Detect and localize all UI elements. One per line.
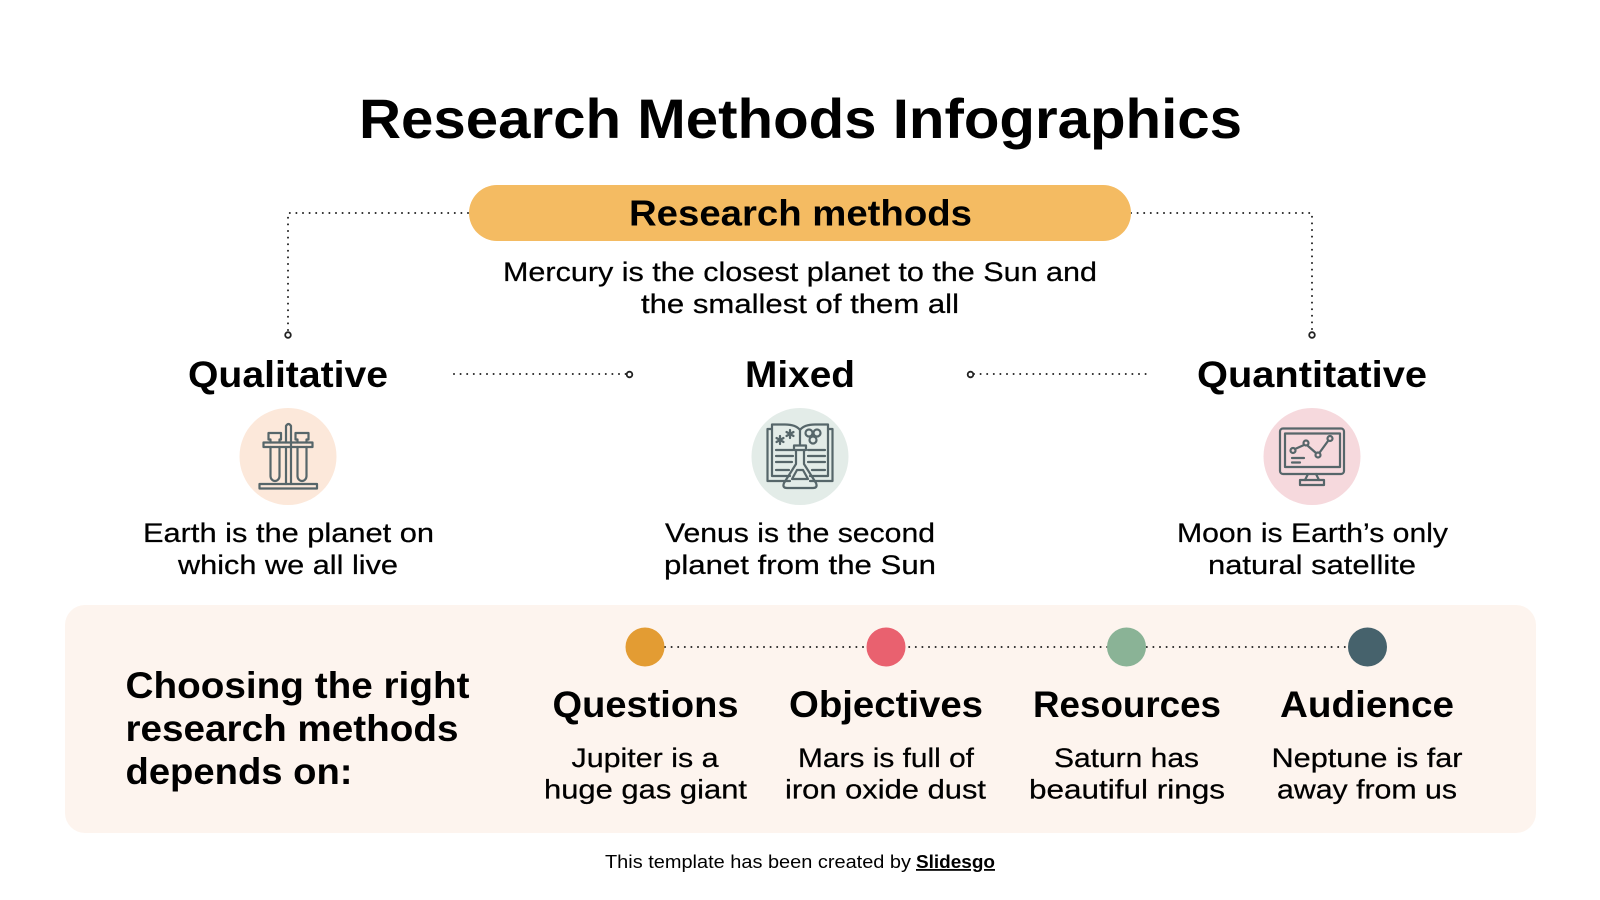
column: questions: Questions — [552, 684, 738, 725]
connector: qualitative to mixed — [454, 372, 632, 377]
column: audience: Neptune is far — [1272, 743, 1463, 773]
description: qualitative: which we all live — [177, 550, 398, 580]
panel: choosing the right research methods — [65, 605, 1536, 833]
connector: methods pill to quantitative — [1131, 213, 1315, 338]
column: objectives: Mars is full of — [798, 743, 975, 773]
column: questions — [544, 684, 748, 804]
column: audience — [1272, 684, 1463, 804]
description: qualitative — [143, 518, 434, 580]
description: mixed: Venus is the second — [665, 518, 935, 548]
footer credit: Slidesgo — [916, 852, 995, 872]
heading: choosing the right research methods — [126, 665, 470, 792]
heading: choosing the right research methods: research methods — [126, 708, 458, 749]
panel: qualitative — [143, 354, 434, 580]
heading: quantitative: Quantitative — [1197, 354, 1427, 395]
column: questions: Jupiter is a — [572, 743, 720, 773]
column: resources: Resources — [1033, 684, 1221, 725]
footer credit: This template has been created by — [605, 852, 911, 872]
description: quantitative: Moon is Earth’s only — [1177, 518, 1449, 548]
column: objectives: iron oxide dust — [785, 774, 987, 804]
pill: research methods — [469, 185, 1131, 241]
icon: test tubes — [240, 408, 336, 505]
panel: mixed — [664, 354, 936, 580]
column: resources: Saturn has — [1054, 743, 1199, 773]
column: resources — [1029, 684, 1225, 804]
description: mixed — [664, 518, 936, 580]
title: Research Methods Infographics — [359, 87, 1242, 150]
intro text — [503, 257, 1097, 319]
description: mixed: planet from the Sun — [664, 550, 936, 580]
column: objectives: Objectives — [789, 684, 983, 725]
icon: monitor with chart — [1264, 408, 1360, 505]
intro text: Mercury is the closest planet to the Sun and — [503, 257, 1097, 287]
heading: choosing the right research methods: Choosing the right — [126, 665, 470, 706]
column: objectives — [785, 684, 987, 804]
icon: book and flask — [752, 408, 848, 505]
heading: qualitative: Qualitative — [188, 354, 388, 395]
panel: quantitative — [1177, 354, 1449, 580]
description: quantitative — [1177, 518, 1449, 580]
column: audience: away from us — [1277, 774, 1457, 804]
connector: methods pill to qualitative — [285, 213, 468, 338]
heading: mixed: Mixed — [745, 354, 855, 395]
timeline: dotted line with dots — [626, 628, 1387, 666]
heading: choosing the right research methods: depends on: — [126, 751, 352, 792]
column: audience: Audience — [1280, 684, 1454, 725]
column: questions: huge gas giant — [544, 774, 748, 804]
description: quantitative: natural satellite — [1208, 550, 1416, 580]
description: qualitative: Earth is the planet on — [143, 518, 434, 548]
intro text: the smallest of them all — [641, 289, 959, 319]
column: resources: beautiful rings — [1029, 774, 1225, 804]
pill: research methods: Research methods — [629, 192, 972, 234]
connector: mixed to quantitative — [968, 372, 1146, 377]
